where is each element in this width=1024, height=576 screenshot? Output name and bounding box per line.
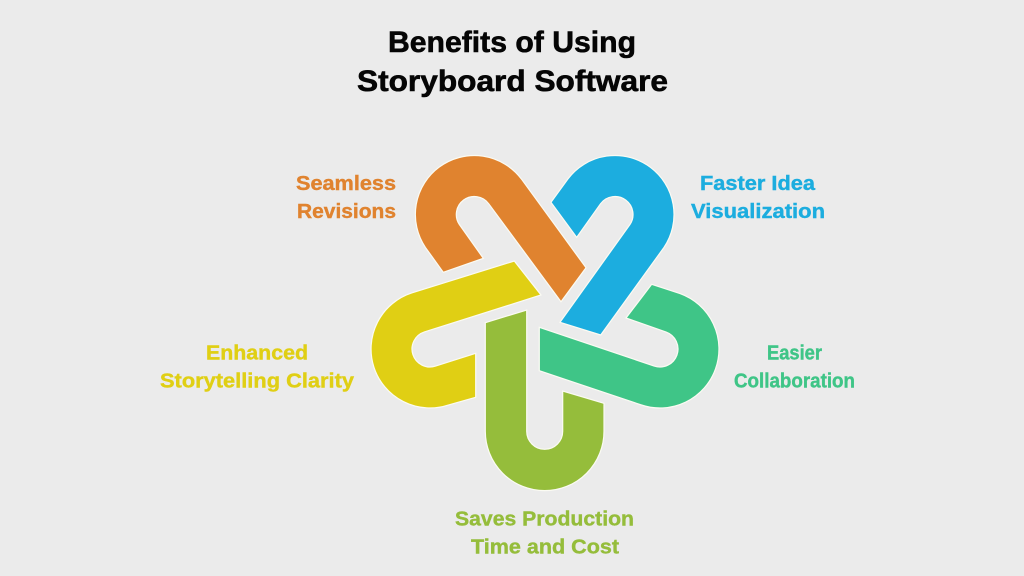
label: Saves Production Time and Cost xyxy=(455,508,634,558)
label: Seamless Revisions: Seamless xyxy=(296,173,396,195)
title: Storyboard Software xyxy=(357,65,668,98)
label: Saves Production Time and Cost: Saves Production xyxy=(455,508,634,530)
loop: yellow xyxy=(371,261,541,408)
loop: lime xyxy=(485,310,604,491)
loop: blue xyxy=(551,155,674,335)
label: Faster Idea Visualization: Visualization xyxy=(691,201,825,223)
label: Faster Idea Visualization: Faster Idea xyxy=(700,173,816,195)
title: Benefits of Using xyxy=(388,26,636,59)
label: Seamless Revisions: Revisions xyxy=(297,201,396,223)
loop: orange xyxy=(415,156,586,302)
label: Enhanced Storytelling Clarity: Storytelling Clarity xyxy=(160,370,355,392)
label: Easier Collaboration: Easier xyxy=(767,342,822,364)
label: Easier Collaboration xyxy=(734,342,855,392)
label: Saves Production Time and Cost: Time and Cost xyxy=(471,536,619,558)
loop: green xyxy=(539,284,719,408)
label: Easier Collaboration: Collaboration xyxy=(734,370,855,392)
label: Enhanced Storytelling Clarity xyxy=(160,342,355,392)
diagram: interlocked five-loop knot xyxy=(371,155,719,491)
label: Seamless Revisions xyxy=(296,173,396,223)
label: Enhanced Storytelling Clarity: Enhanced xyxy=(206,342,308,364)
title xyxy=(357,26,668,98)
label: Faster Idea Visualization xyxy=(691,173,825,223)
